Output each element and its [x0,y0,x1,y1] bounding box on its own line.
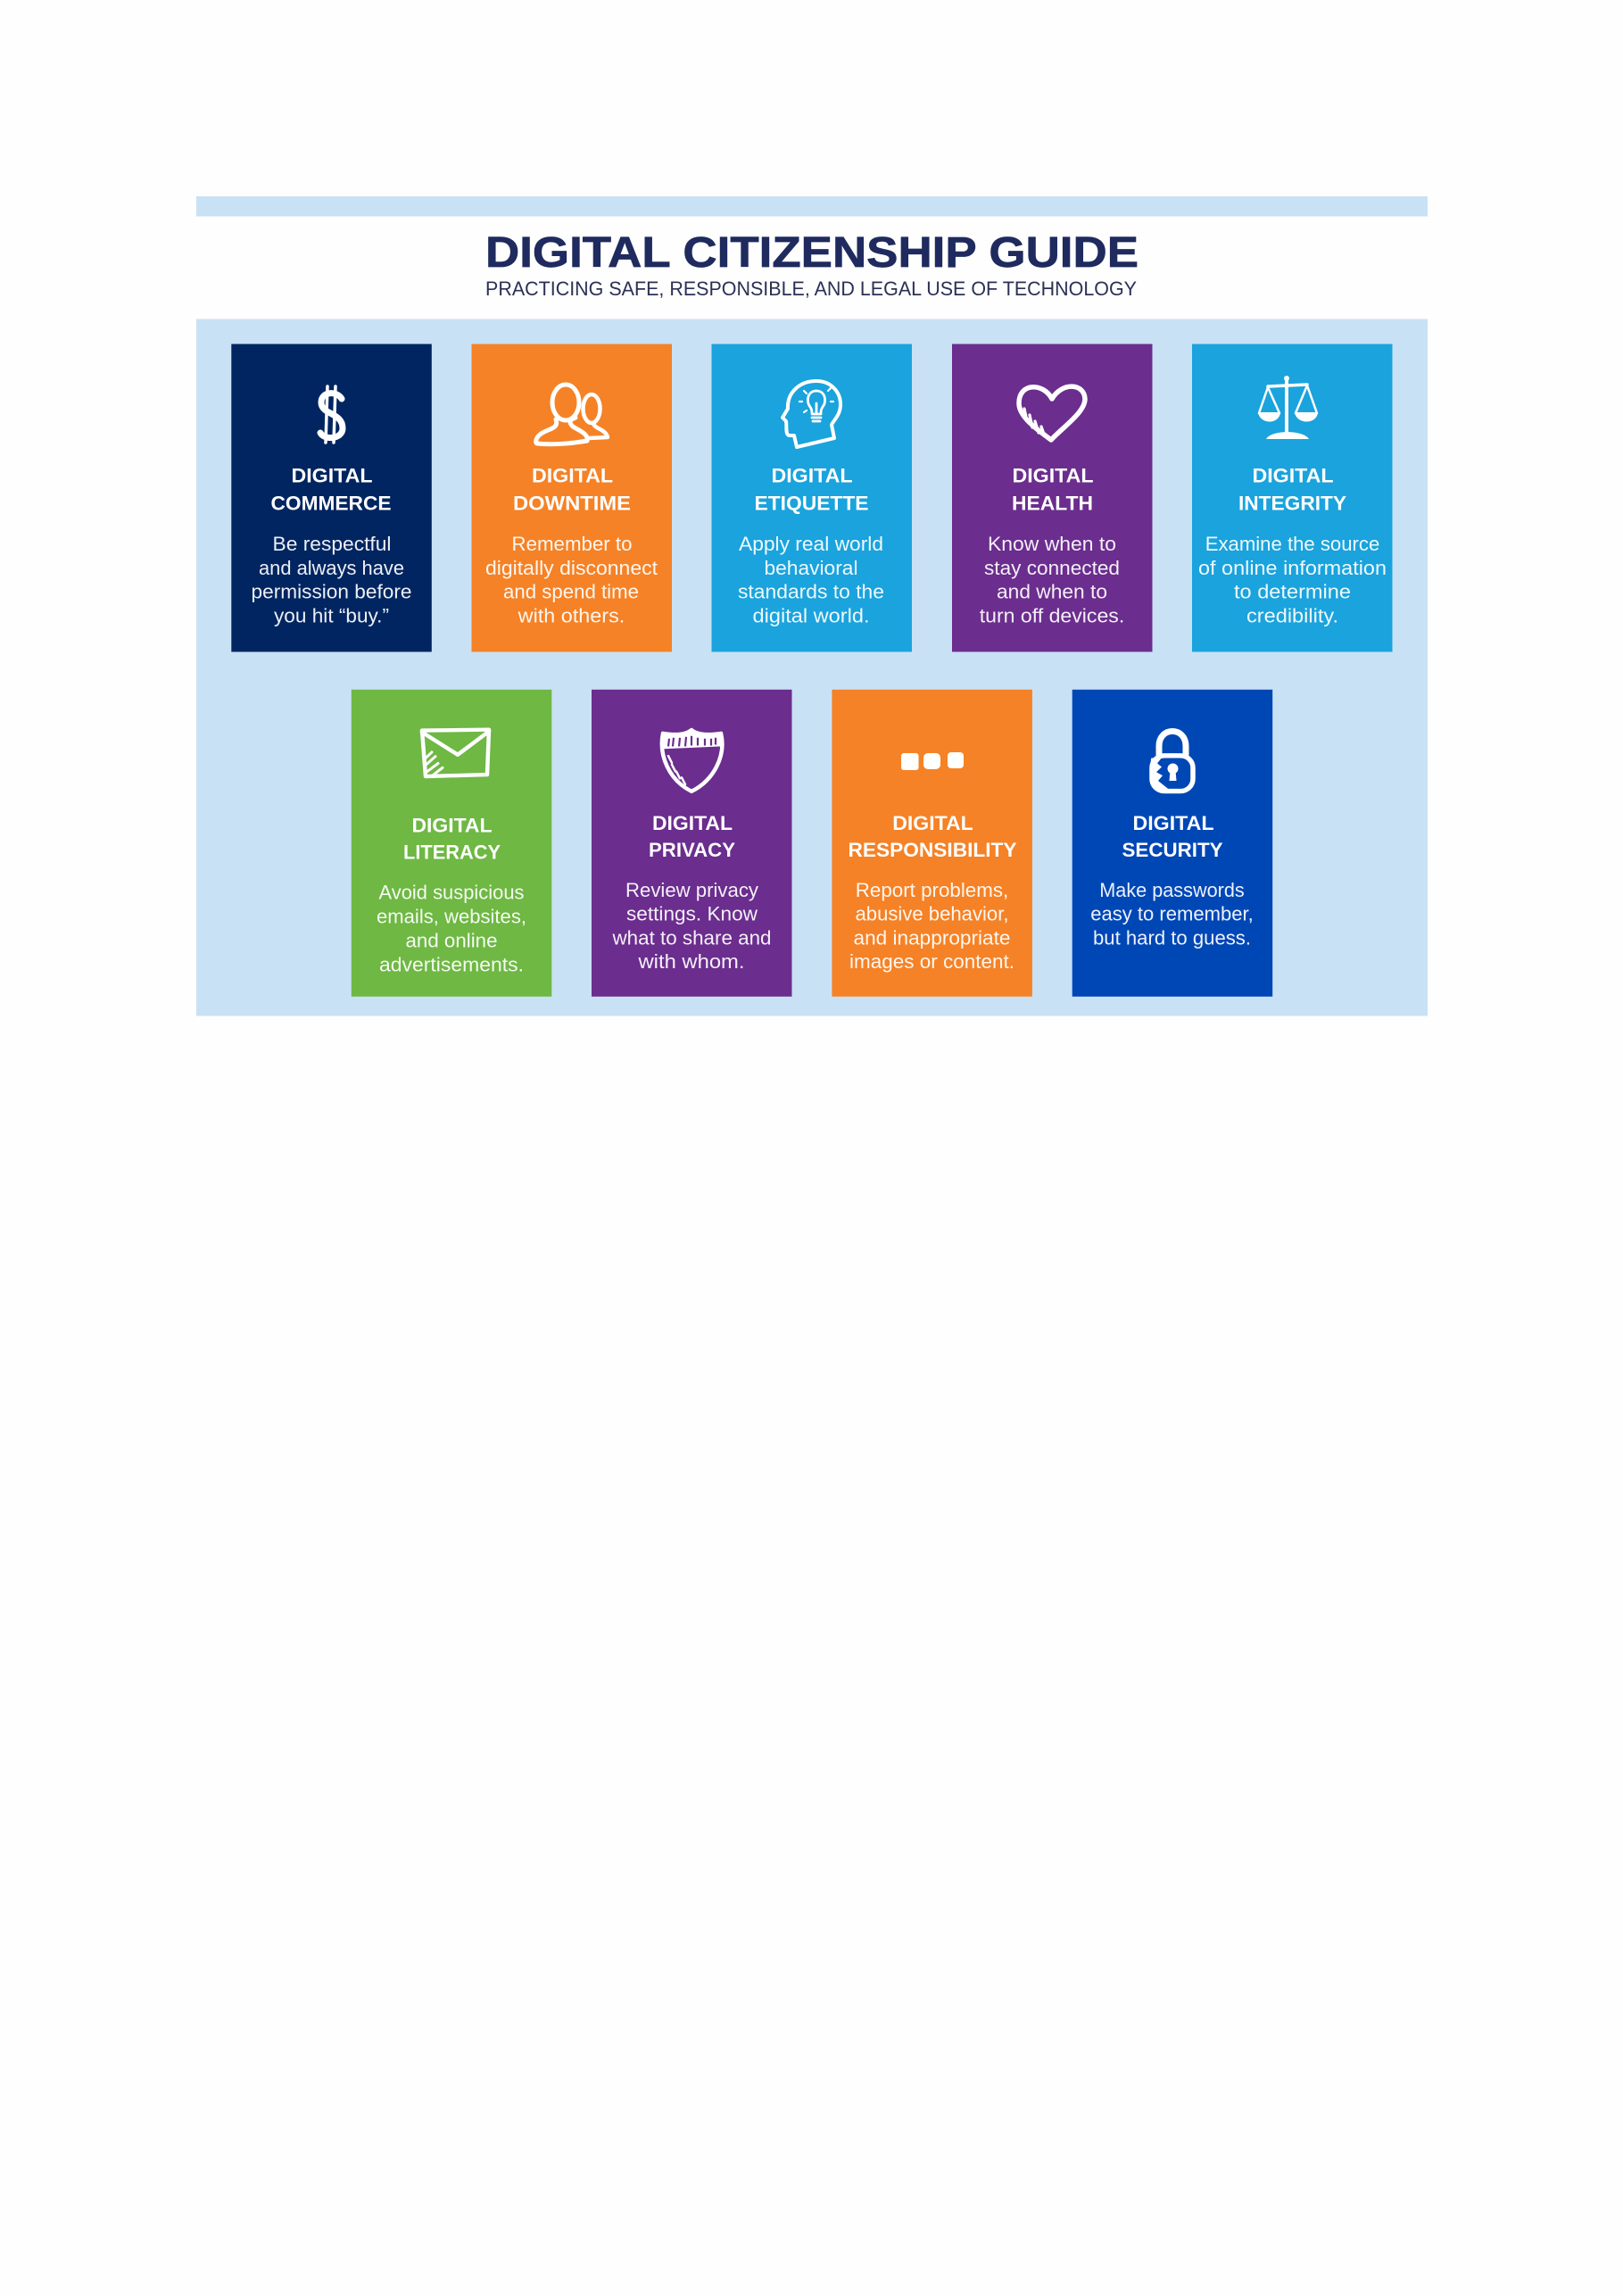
icon: shield [662,730,722,792]
heading: digital etiquette: DIGITAL [771,465,853,487]
text: digital health description: Know when to [988,533,1116,555]
card: digital literacy [352,690,551,997]
text: digital health description: turn off devices. [980,605,1124,627]
text: digital etiquette description: behavioral [764,557,858,579]
heading: digital downtime: DIGITAL [532,465,613,487]
icon: three speech squares [901,752,964,770]
text: digital responsibility description: images or content. [849,950,1014,973]
subtitle: PRACTICING SAFE, RESPONSIBLE, AND LEGAL USE OF TECHNOLOGY [485,278,1137,300]
card: digital health [952,344,1153,651]
heading: digital security: DIGITAL [1133,812,1214,834]
icon: balance scales [1258,376,1318,439]
heading: digital commerce: DIGITAL [291,465,373,487]
text: digital privacy description: what to share and [611,926,771,949]
heading: digital etiquette: ETIQUETTE [755,493,869,515]
heading: digital responsibility: RESPONSIBILITY [848,839,1017,861]
heading: digital responsibility [848,812,1017,861]
card: digital integrity [1192,344,1392,651]
text: digital privacy description: with whom. [637,950,744,973]
heading: digital downtime: DOWNTIME [513,493,631,515]
text: digital downtime description [485,533,658,627]
heading: digital literacy: LITERACY [403,841,501,863]
text: digital responsibility description [849,879,1014,973]
text: digital integrity description: Examine the source [1205,533,1379,555]
text: digital privacy description: settings. Know [626,903,758,925]
text: digital downtime description: and spend time [503,581,639,603]
text: digital integrity description: to determine [1234,581,1351,603]
heading: digital responsibility: DIGITAL [892,812,973,834]
text: digital security description: Make passwords [1099,879,1245,901]
heading: digital integrity [1238,465,1346,515]
heading: digital security [1122,812,1222,861]
text: digital health description [980,533,1124,627]
heading: digital security: SECURITY [1122,839,1222,861]
text: digital health description: stay connected [984,557,1120,579]
text: digital downtime description: Remember to [512,533,632,555]
heading: digital integrity: DIGITAL [1253,465,1334,487]
text: digital integrity description: credibility. [1246,605,1338,627]
text: digital security description: easy to remember, [1090,903,1254,925]
text: digital security description: but hard to guess. [1093,926,1251,949]
icon: heart [1019,386,1085,440]
text: digital responsibility description: abusive behavior, [855,903,1008,925]
heading: digital literacy [403,815,501,863]
text: digital etiquette description: digital world. [753,605,869,627]
text: digital commerce description: permission before [252,581,412,603]
heading: digital literacy: DIGITAL [412,815,493,837]
text: digital etiquette description: standards to the [738,581,884,603]
heading: digital health [1012,465,1094,515]
heading: digital privacy [649,812,735,861]
text: digital responsibility description: and inappropriate [853,926,1010,949]
text: digital commerce description: and always have [259,557,404,579]
text: digital responsibility description: Report problems, [856,879,1008,901]
top accent band [196,196,1428,216]
heading: digital privacy: DIGITAL [652,812,733,834]
heading: digital commerce: COMMERCE [271,493,391,515]
background panel [196,319,1428,1015]
text: digital literacy description: advertisements. [379,953,524,975]
text: digital privacy description: Review privacy [625,879,758,901]
text: digital literacy description: and online [405,930,498,952]
card: digital commerce [231,344,432,651]
icon: padlock [1150,731,1193,792]
text: digital integrity description [1198,533,1387,627]
heading: digital health: HEALTH [1012,493,1093,515]
heading: digital commerce [271,465,391,515]
text: digital literacy description [377,882,526,975]
text: digital security description [1090,879,1254,949]
card: digital privacy [592,690,792,997]
heading: digital integrity: INTEGRITY [1238,493,1346,515]
card: digital downtime [471,344,672,651]
text: digital etiquette description: Apply real world [739,533,883,555]
card: digital etiquette [712,344,912,651]
text: digital integrity description: of online information [1198,557,1387,579]
icon: two people [536,385,608,444]
text: digital downtime description: with others. [518,605,625,627]
text: digital downtime description: digitally disconnect [485,557,658,579]
text: digital literacy description: Avoid suspicious [378,882,525,904]
heading: digital privacy: PRIVACY [649,839,735,861]
icon: head with light bulb [783,381,840,447]
text: digital commerce description: you hit “buy.” [274,605,389,627]
text: digital literacy description: emails, websites, [377,906,526,928]
text: digital commerce description [252,533,412,627]
card: digital security [1072,690,1272,997]
text: digital etiquette description [738,533,884,627]
icon: dollar sign [320,386,343,443]
text: digital commerce description: Be respectful [273,533,391,555]
heading: digital health: DIGITAL [1012,465,1094,487]
text: digital health description: and when to [997,581,1107,603]
card: digital responsibility [832,690,1032,997]
text: digital privacy description [611,879,771,973]
heading: digital etiquette [755,465,869,515]
title: DIGITAL CITIZENSHIP GUIDE [485,228,1139,277]
icon: envelope [422,730,489,776]
heading: digital downtime [513,465,631,515]
